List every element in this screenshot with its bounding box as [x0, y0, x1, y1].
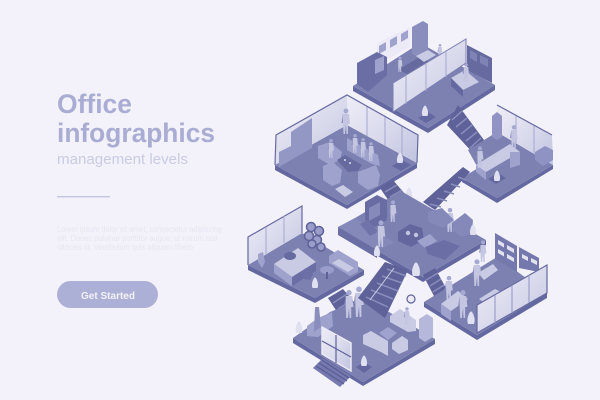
vase on rug	[392, 152, 411, 171]
room: low right office	[424, 233, 547, 340]
glass wall	[497, 105, 553, 165]
stairs: meeting room to center	[380, 180, 412, 207]
body text	[57, 224, 222, 252]
vase on rug	[418, 106, 436, 123]
glass wall	[393, 39, 466, 112]
couple walking	[344, 287, 364, 318]
body text: ultricies id. Vestibulum quis aliquam libero	[57, 242, 193, 252]
desks and staff	[441, 240, 505, 321]
room: meeting room	[275, 95, 418, 209]
cabinet	[365, 195, 387, 227]
chair	[258, 252, 265, 268]
people	[376, 200, 454, 247]
room: top office	[353, 21, 495, 133]
vase	[312, 278, 318, 288]
desks and staff	[476, 125, 520, 180]
manager desk	[451, 63, 479, 97]
person at desk	[397, 44, 442, 76]
vases	[374, 224, 476, 276]
escalator: center to bottom	[358, 262, 408, 318]
title	[57, 89, 215, 148]
stairs: top to right	[447, 105, 484, 155]
room: bottom lounge	[293, 287, 435, 387]
body text: Lorem ipsum dolor sit amet, consectetur adipiscing	[57, 224, 222, 234]
round table	[320, 266, 334, 279]
partition shelves	[495, 233, 539, 272]
glass wall	[477, 265, 547, 333]
filing cabinet	[419, 314, 433, 342]
left cabinet	[357, 52, 387, 92]
vase	[296, 321, 302, 333]
back right glass wall	[347, 95, 418, 163]
divider line	[57, 196, 110, 197]
subtitle: management levels	[57, 151, 188, 168]
sofa	[329, 250, 358, 276]
title: Office	[57, 89, 132, 119]
reception desk	[307, 307, 333, 337]
body text: elit. Donec pulvinar porttitor augue, ut rutrum nisl	[57, 233, 217, 243]
right dark cabinet	[467, 45, 492, 83]
room: right desks	[462, 105, 553, 203]
reception counter	[338, 218, 395, 258]
vase	[467, 311, 475, 324]
wall outline	[275, 95, 418, 165]
room: center lobby	[338, 191, 486, 282]
small table	[335, 185, 353, 197]
button: get started: Get Started	[81, 290, 135, 302]
armchair	[300, 268, 313, 280]
title: infographics	[57, 118, 215, 148]
meeting table and chairs	[318, 134, 380, 190]
tall cabinet	[412, 21, 428, 57]
button: get started	[57, 281, 158, 308]
pillar	[492, 112, 502, 140]
cabinet	[535, 146, 553, 166]
sofas right	[428, 208, 473, 237]
executive desk	[274, 248, 316, 286]
room: left office	[248, 206, 364, 303]
vase on rug	[488, 170, 506, 184]
sofas and table	[363, 307, 416, 356]
standing person	[342, 109, 350, 134]
stairs: center to right	[423, 167, 470, 210]
wall clock	[407, 295, 415, 303]
stairs: center to low right	[423, 268, 446, 298]
back left glass wall	[275, 95, 347, 165]
stairs: left to bottom	[328, 289, 360, 321]
dark lounge set	[398, 224, 460, 260]
cabinets	[279, 118, 312, 167]
isometric office illustration	[248, 21, 553, 387]
glass wall	[248, 206, 302, 265]
window panel	[322, 327, 351, 371]
round bookshelf	[304, 222, 325, 251]
front steps	[313, 358, 351, 387]
vase on rug	[356, 356, 372, 373]
wall with pictures	[377, 27, 410, 65]
